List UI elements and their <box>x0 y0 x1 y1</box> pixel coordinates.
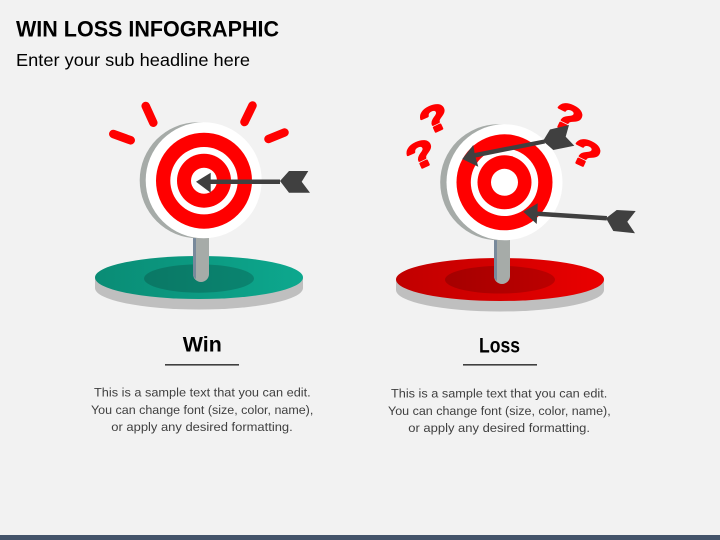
text block: loss <box>388 387 611 435</box>
icon: win target <box>140 122 262 238</box>
icon: loss pole <box>494 232 510 284</box>
panel: loss <box>388 93 636 435</box>
icon: question marks: ? <box>546 93 589 142</box>
icon: loss platform <box>396 258 604 312</box>
icon: question marks <box>400 93 607 179</box>
icon: celebration rays <box>113 106 284 140</box>
text block: win <box>91 386 313 434</box>
title: WIN LOSS INFOGRAPHIC <box>16 16 279 42</box>
text block: win: You can change font (size, color, name), <box>91 403 313 417</box>
footer bar <box>0 535 720 540</box>
icon: question marks: ? <box>413 94 456 143</box>
text block: loss: or apply any desired formatting. <box>408 421 590 435</box>
icon: win platform <box>95 256 303 310</box>
divider: win <box>165 364 239 366</box>
icon: loss target <box>440 124 562 240</box>
text block: win: This is a sample text that you can edit. <box>94 386 311 400</box>
icon: question marks: ? <box>400 130 443 179</box>
icon: win pole <box>193 230 209 282</box>
subtitle: Enter your sub headline here <box>16 50 250 70</box>
heading: loss: Loss <box>479 335 520 358</box>
heading: win: Win <box>183 334 222 357</box>
text block: win: or apply any desired formatting. <box>111 420 293 434</box>
divider: loss <box>463 364 537 366</box>
icon: arrow hitting lower ring <box>523 203 636 233</box>
text block: loss: You can change font (size, color, name), <box>388 404 611 418</box>
icon: arrow hitting upper ring <box>462 125 574 167</box>
icon: win arrow in bullseye <box>196 171 310 193</box>
icon: question marks: ? <box>564 129 607 178</box>
panel: win <box>91 106 313 434</box>
text block: loss: This is a sample text that you can edit. <box>391 387 607 401</box>
